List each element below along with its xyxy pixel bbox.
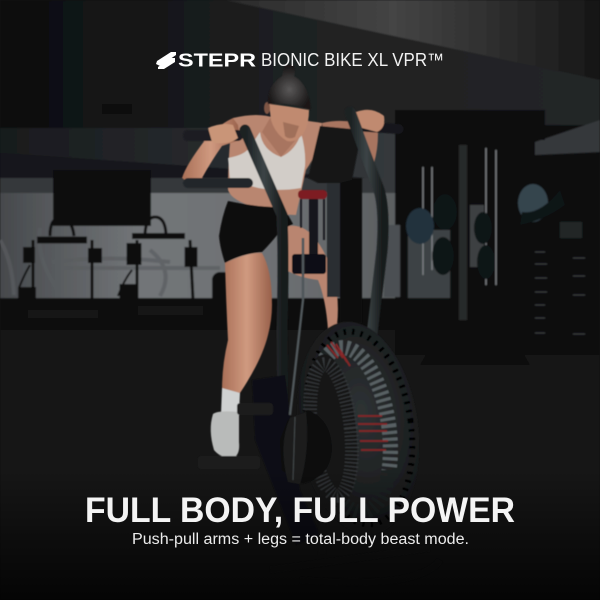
fan hub bbox=[280, 410, 332, 484]
shoe bbox=[211, 411, 239, 457]
medicine ball 2 bbox=[518, 184, 565, 225]
dumbbell shadow left of rider bbox=[212, 272, 236, 322]
seat bbox=[298, 190, 327, 199]
seat supports bbox=[301, 199, 324, 240]
bike rear and rider bbox=[182, 64, 416, 527]
base frame bbox=[270, 490, 440, 582]
left wall upper band bbox=[0, 128, 395, 180]
lit wall panel 3 bbox=[384, 225, 400, 297]
rack column bbox=[459, 145, 467, 320]
treadmill shadows on wall bbox=[0, 228, 220, 296]
right wall strip bbox=[535, 120, 600, 155]
brand header bbox=[156, 50, 444, 70]
subheading: Push-pull arms + legs = total-body beast mode. bbox=[132, 531, 469, 548]
rack rails bbox=[423, 148, 496, 285]
left handle pole bbox=[245, 130, 283, 420]
pedal bbox=[198, 456, 260, 469]
TV screen bbox=[53, 170, 151, 226]
shorts bbox=[219, 201, 293, 263]
face bbox=[269, 104, 309, 141]
hair bbox=[268, 64, 311, 110]
left wall beam bbox=[0, 153, 395, 188]
wall bbox=[0, 190, 395, 300]
fan outer slots bbox=[294, 325, 424, 531]
headline: FULL BODY, FULL POWER bbox=[85, 491, 515, 530]
console bbox=[308, 126, 362, 183]
far forearm bbox=[322, 121, 378, 163]
fan red glow bbox=[327, 342, 388, 450]
treadmill right deck bbox=[138, 306, 203, 315]
hand right bbox=[356, 110, 384, 132]
floor band bbox=[0, 298, 600, 330]
crank bbox=[237, 403, 273, 415]
seat stem bbox=[309, 198, 318, 260]
right handle bbox=[355, 121, 404, 134]
lit wall panel 2 bbox=[470, 205, 484, 267]
console shadow column bbox=[340, 178, 362, 323]
wall shadow strip bbox=[0, 178, 395, 193]
bra bbox=[228, 132, 305, 190]
plates bbox=[432, 194, 495, 279]
right gym area dark bbox=[395, 125, 600, 355]
lit wall panel 4 bbox=[560, 222, 582, 238]
hand left bbox=[208, 124, 238, 143]
ceiling light wedge bbox=[225, 0, 600, 80]
bottom gradient bbox=[0, 470, 600, 600]
dumbbell rack bbox=[535, 252, 585, 334]
near arm bbox=[182, 118, 240, 182]
fan rib ring dim bbox=[336, 506, 372, 518]
fan grille bbox=[298, 352, 364, 508]
logo icon bbox=[156, 52, 176, 69]
seat clamp bbox=[292, 254, 326, 274]
rack upper bbox=[395, 110, 545, 140]
near leg bbox=[222, 253, 272, 393]
face shadow bbox=[283, 122, 299, 138]
right handle pole bbox=[350, 112, 383, 343]
fan housing bbox=[284, 314, 432, 542]
rack base bbox=[420, 348, 530, 365]
fan rib ring lit bbox=[318, 340, 398, 471]
treadmill left bbox=[19, 218, 95, 307]
lit wall panel 1 bbox=[408, 230, 450, 298]
frame body bbox=[252, 375, 320, 545]
thin rod bbox=[290, 238, 303, 415]
torso bbox=[228, 115, 322, 215]
neck bbox=[262, 118, 300, 157]
left lower handle bbox=[183, 178, 253, 188]
treadmill left deck bbox=[28, 310, 98, 318]
medicine ball 1 bbox=[406, 208, 434, 244]
product name: BIONIC BIKE XL VPR™ bbox=[261, 50, 444, 70]
brand wordmark: STEPR bbox=[178, 50, 256, 70]
fan grille dots bbox=[304, 362, 358, 498]
treadmill right bbox=[118, 217, 193, 307]
left upper handle bbox=[183, 130, 243, 141]
sock bbox=[221, 388, 240, 414]
ceiling bbox=[0, 0, 600, 160]
center column bbox=[327, 162, 340, 297]
ear bbox=[264, 102, 270, 114]
far leg bbox=[283, 226, 338, 330]
ceiling vent bbox=[102, 104, 132, 114]
